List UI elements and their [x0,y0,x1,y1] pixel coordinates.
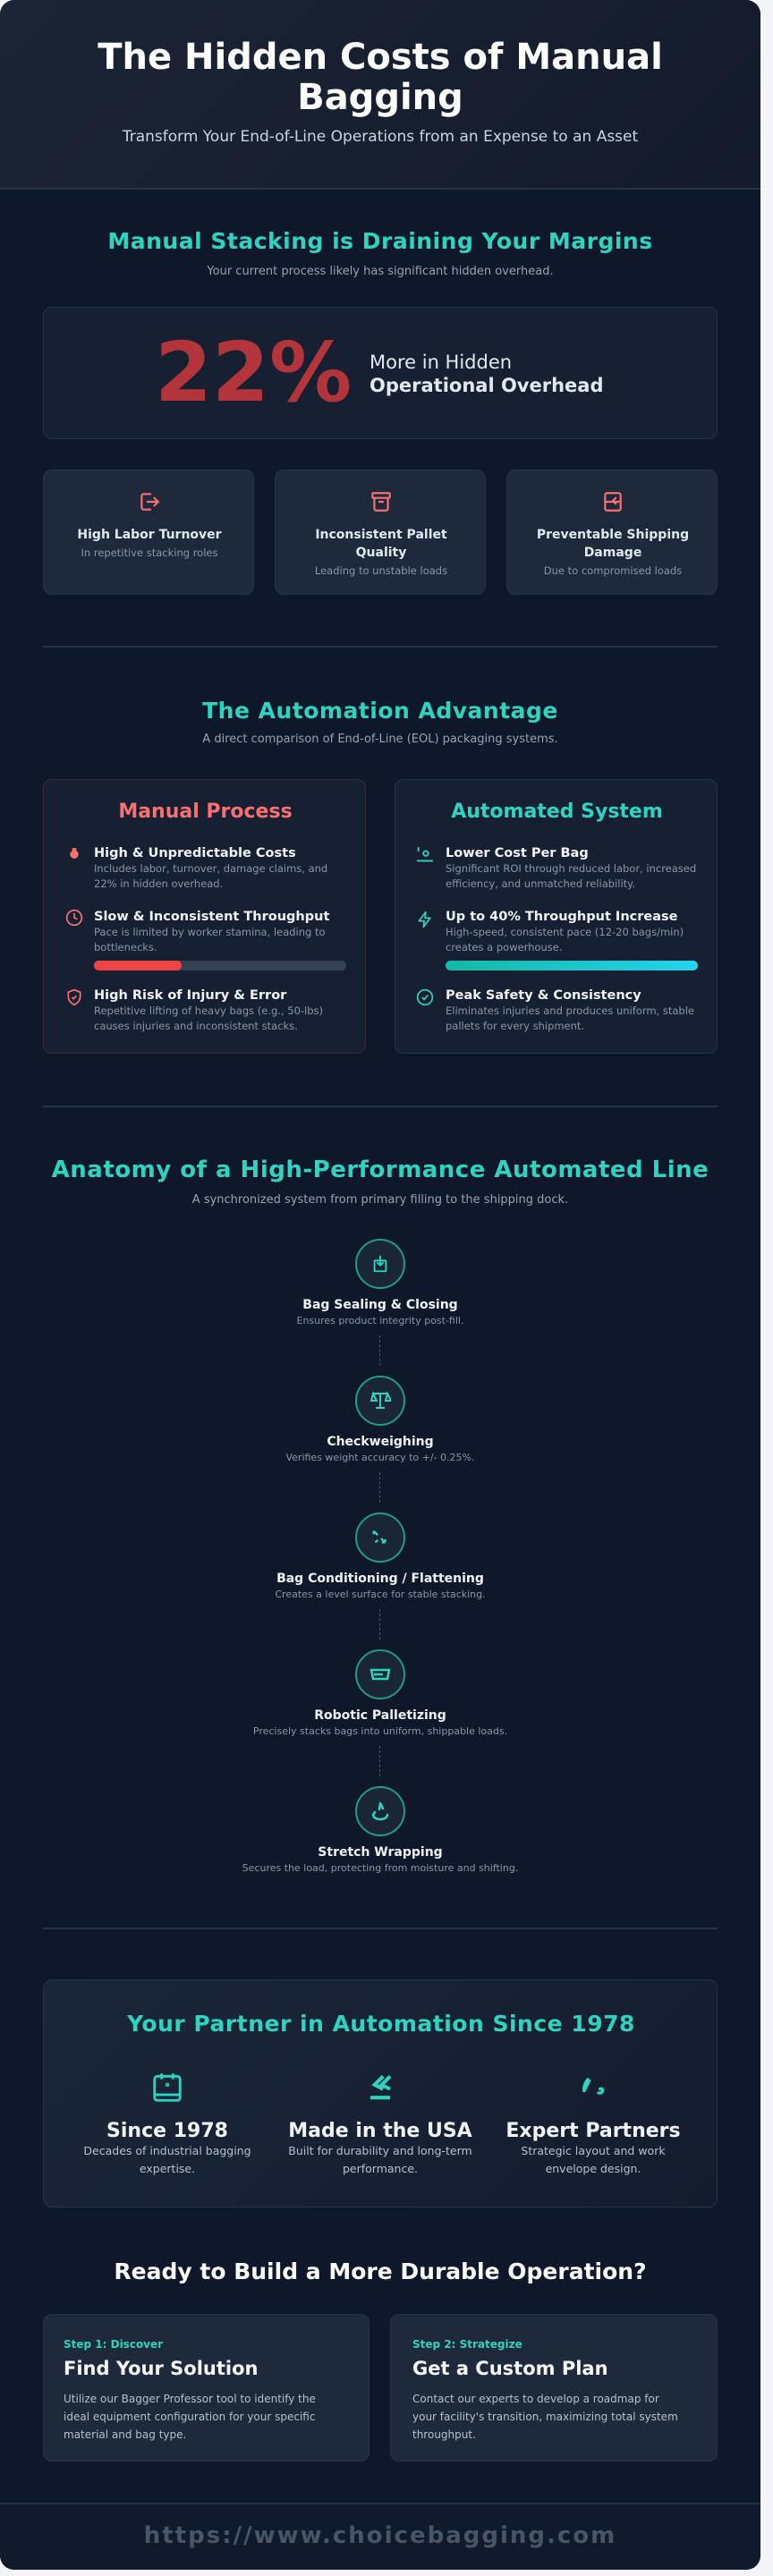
step 4 text: Robotic Palletizing [314,1708,446,1723]
step 4 text [253,1708,507,1737]
step 5 icon [355,1786,405,1836]
card: step 2: throughput. [412,2428,476,2441]
item: costs [94,846,327,890]
item: throughput: Pace is limited by worker stamina, leading to [94,926,326,938]
card: step 2: Step 2: Strategize [412,2338,522,2351]
item: throughput: Slow & Inconsistent Throughput [94,910,329,924]
item: lower cost: Significant ROI through reduced labor, increased [446,862,696,875]
icon: box [371,492,391,512]
item: injury: causes injuries and inconsistent stacks. [94,1020,298,1032]
step 1 text [297,1298,463,1326]
heading: anatomy: Anatomy of a High-Performance Automated Line [52,1157,709,1183]
card: shipping damage: Damage [584,546,641,560]
col: expert partners: envelope design. [546,2162,641,2175]
card: step 2: your facility's transition, maximizing total system [412,2411,678,2423]
item: costs: Includes labor, turnover, damage claims, and [94,862,327,875]
card: pallet quality: Leading to unstable loads [315,564,447,577]
process flow [242,1239,518,1874]
item: injury: Repetitive lifting of heavy bags (e.g., 50-lbs) [94,1004,323,1017]
item: throughput increase: creates a powerhouse. [446,941,563,953]
stat text: Operational Overhead [370,375,603,396]
footer url: https://www.choicebagging.com [144,2522,616,2549]
col: made in usa [288,2075,472,2175]
step 3 text: Bag Conditioning / Flattening [276,1572,484,1586]
step 2 text: Verifies weight accuracy to +/- 0.25%. [285,1452,475,1463]
item: lower cost: Lower Cost Per Bag [446,846,589,860]
big number: 22% [155,325,352,420]
icon: handshake [582,2077,605,2095]
icon: lightning [419,911,431,928]
col: since 1978: Decades of industrial bagging [83,2144,251,2157]
step 3 text [275,1572,486,1600]
step 4 text: Precisely stacks bags into uniform, shippable loads. [253,1725,507,1737]
card: labor turnover: High Labor Turnover [77,528,222,542]
step 2 icon [355,1376,405,1426]
card: labor turnover [43,470,254,595]
icon: clock [66,909,82,927]
card: shipping damage [506,470,718,595]
title: Bagging [297,77,463,118]
item: lower cost [446,846,696,890]
card: shipping damage: Due to compromised loads [544,564,682,577]
step 3 icon [355,1513,405,1563]
icon: check circle [417,989,433,1005]
panel: partner [43,1979,718,2207]
icon: coin [417,846,433,862]
item: throughput: bottlenecks. [94,941,157,953]
item: injury [94,988,323,1032]
col: made in usa: Made in the USA [288,2120,472,2142]
item: throughput increase [446,910,684,953]
stat panel: 22% [43,307,718,439]
step 2 text: Checkweighing [327,1435,434,1449]
card: step 2: Contact our experts to develop a roadmap for [412,2393,659,2405]
header [0,0,760,190]
step 3 text: Creates a level surface for stable stacking. [275,1589,486,1600]
step 1 icon [355,1239,405,1289]
step 1 text: Ensures product integrity post-fill. [297,1315,463,1326]
col: expert partners: Strategic layout and work [521,2144,666,2157]
card: step 1 [43,2314,370,2462]
title: The Hidden Costs of Manual [98,37,663,78]
stat text: More in Hidden [370,352,512,373]
card: step 2: Get a Custom Plan [412,2358,608,2379]
col: expert partners: Expert Partners [505,2120,681,2142]
item: safety: pallets for every shipment. [446,1020,584,1032]
bar: manual throughput [94,961,346,970]
card: pallet quality: Inconsistent Pallet [315,528,447,542]
card: pallet quality: Quality [356,546,406,560]
step 5 text [242,1845,518,1874]
item: injury: High Risk of Injury & Error [94,988,286,1003]
step 1 text: Bag Sealing & Closing [302,1298,458,1312]
item: lower cost: efficiency, and unmatched reliability. [446,877,635,890]
subheading: A direct comparison of End-of-Line (EOL) packaging systems. [202,733,558,746]
stat text [370,352,603,396]
heading: automation advantage: The Automation Advantage [202,698,558,724]
item: throughput [94,910,329,953]
partner heading: Your Partner in Automation Since 1978 [127,2011,635,2037]
card: step 2 [390,2314,718,2462]
card: labor turnover: In repetitive stacking roles [81,547,217,559]
heading: manual stacking: Manual Stacking is Draining Your Margins [107,228,653,254]
icon: cost [70,848,79,859]
CTA heading: Ready to Build a More Durable Operation? [114,2258,647,2284]
panel: automated system [395,779,718,1054]
col: since 1978 [83,2073,251,2175]
card: step 1: ideal equipment configuration for your specific [64,2411,315,2423]
icon: chevrons [370,2075,392,2100]
item: throughput increase: Up to 40% Throughput Increase [446,910,677,924]
icon: calendar [153,2073,182,2102]
item: costs: 22% in hidden overhead. [94,877,223,890]
step 4 icon [355,1649,405,1699]
card: step 1: Utilize our Bagger Professor tool to identify the [64,2393,316,2405]
title [98,37,663,118]
item: throughput increase: High-speed, consistent pace (12-20 bags/min) [446,926,684,938]
col: expert partners [505,2077,681,2175]
step 2 text [285,1435,475,1463]
step 5 text: Stretch Wrapping [318,1845,443,1860]
icon: shield [68,989,81,1005]
icon: exit door [140,493,159,511]
col: made in usa: Built for durability and long-term [288,2144,472,2157]
col: since 1978: expertise. [140,2162,195,2175]
panel title: Automated System [451,801,663,823]
subheading: Your current process likely has significant hidden overhead. [207,265,554,278]
item: costs: High & Unpredictable Costs [94,846,296,860]
card: step 1: material and bag type. [64,2428,186,2441]
bar: automated throughput [446,961,698,970]
panel: manual process [43,779,366,1054]
subtitle: Transform Your End-of-Line Operations from an Expense to an Asset [123,128,638,146]
card: step 1: Find Your Solution [64,2358,258,2379]
card: shipping damage: Preventable Shipping [537,528,689,542]
card: pallet quality [275,470,486,595]
item: safety: Peak Safety & Consistency [446,988,641,1003]
item: safety: Eliminates injuries and produces uniform, stable [446,1004,694,1017]
card: step 1: Step 1: Discover [64,2338,163,2351]
panel title: Manual Process [118,801,293,823]
subheading: A synchronized system from primary filling to the shipping dock. [192,1193,568,1207]
col: since 1978: Since 1978 [106,2120,228,2142]
step 5 text: Secures the load, protecting from moisture and shifting. [242,1862,518,1874]
col: made in usa: performance. [343,2162,418,2175]
item: safety [446,988,694,1032]
footer [0,2503,760,2570]
icon: damaged box [604,492,622,512]
